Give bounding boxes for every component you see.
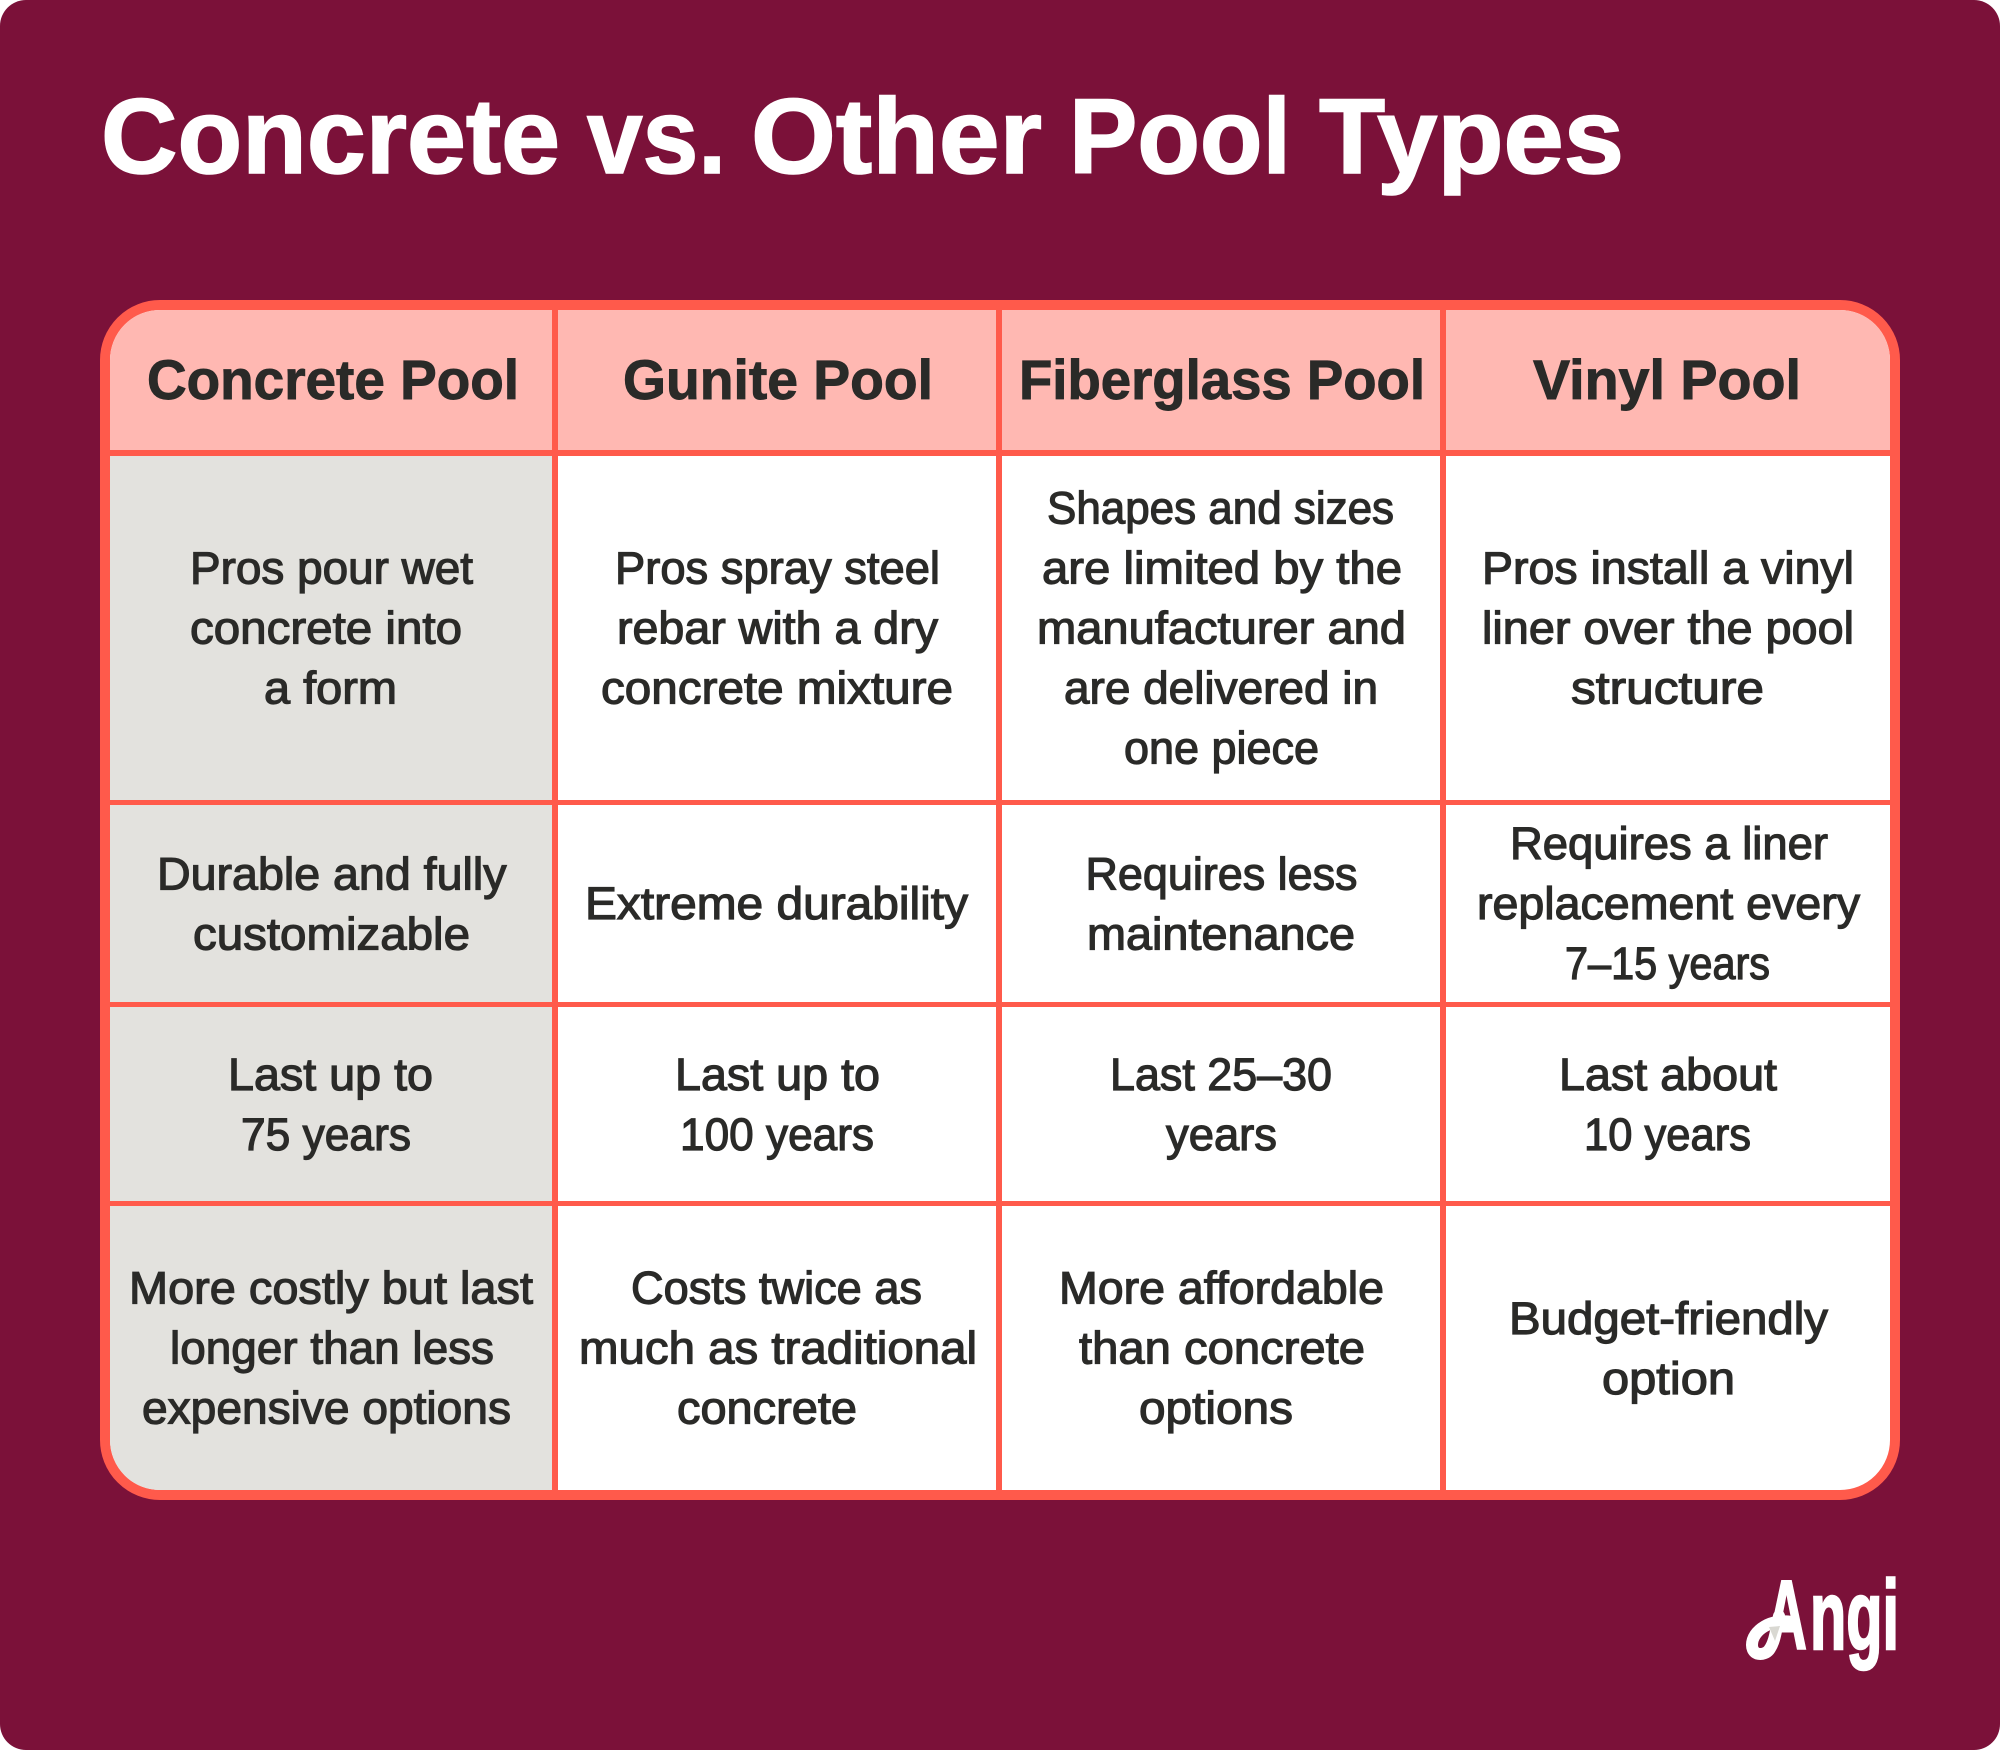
column headings: Concrete Pool <box>147 348 519 411</box>
row: construction: Pros spray steel <box>615 542 940 594</box>
row: construction <box>190 482 1854 774</box>
row: lifespan: Last about <box>1559 1049 1778 1100</box>
column headings: Vinyl Pool <box>1533 348 1801 411</box>
row: durability: maintenance <box>1087 908 1355 960</box>
row: cost: than concrete <box>1079 1322 1365 1374</box>
row: durability: Requires less <box>1086 848 1358 900</box>
first column fill <box>110 456 552 1490</box>
row: durability: Extreme durability <box>585 878 969 929</box>
row: lifespan: 75 years <box>241 1109 411 1160</box>
title: Concrete <box>101 76 560 196</box>
header row fill <box>110 310 1890 450</box>
row: lifespan: years <box>1166 1109 1277 1160</box>
title: Types <box>1319 76 1624 196</box>
row: construction: structure <box>1571 662 1764 714</box>
row: construction: rebar with a dry <box>617 602 939 654</box>
table base <box>105 305 1895 1495</box>
row: lifespan: Last 25–30 <box>1110 1049 1332 1100</box>
title <box>101 76 1624 196</box>
column headings <box>147 348 1801 411</box>
row: lifespan: 100 years <box>680 1109 874 1160</box>
row: lifespan: 10 years <box>1584 1109 1751 1160</box>
row: construction: a form <box>264 662 397 714</box>
row: durability: customizable <box>193 908 470 960</box>
row: lifespan: Last up to <box>675 1049 880 1100</box>
row: construction: Shapes and sizes <box>1047 482 1394 534</box>
row: construction: Pros pour wet <box>190 542 474 594</box>
logo: Angi: ngi <box>1810 1560 1899 1670</box>
title: vs. <box>587 76 726 196</box>
row: cost: longer than less <box>170 1322 494 1374</box>
row: construction: Pros install a vinyl <box>1482 542 1854 594</box>
row: construction: are delivered in <box>1064 662 1378 714</box>
row: cost: expensive options <box>142 1382 511 1434</box>
row: cost <box>129 1262 1829 1434</box>
row: cost: Budget-friendly <box>1509 1293 1829 1344</box>
logo: Angi <box>1752 1560 1899 1670</box>
row: durability: replacement every <box>1477 878 1861 929</box>
row: lifespan: Last up to <box>228 1049 433 1100</box>
row: durability <box>157 818 1861 989</box>
row: durability: Requires a liner <box>1510 818 1828 869</box>
row: construction: are limited by the <box>1042 542 1402 594</box>
row: cost: More costly but last <box>129 1262 534 1314</box>
column headings: Gunite Pool <box>623 348 933 411</box>
row: lifespan <box>228 1049 1778 1160</box>
row: cost: Costs twice as <box>631 1262 922 1314</box>
column headings: Fiberglass Pool <box>1019 348 1425 411</box>
row: cost: concrete <box>677 1382 857 1434</box>
row: construction: one piece <box>1124 722 1319 774</box>
panel: comparison table <box>105 305 1895 1495</box>
title: Other <box>751 76 1042 196</box>
row: durability: Durable and fully <box>157 848 507 900</box>
row: cost: option <box>1602 1353 1735 1404</box>
row: construction: manufacturer and <box>1037 602 1406 654</box>
row: cost: options <box>1139 1382 1293 1434</box>
row: construction: concrete into <box>190 602 462 654</box>
title: Pool <box>1069 76 1291 196</box>
row: construction: liner over the pool <box>1482 602 1854 654</box>
row: cost: much as traditional <box>579 1322 977 1374</box>
row: durability: 7–15 years <box>1565 938 1770 989</box>
row: construction: concrete mixture <box>601 662 953 714</box>
logo: Angi: A <box>1766 1560 1807 1670</box>
row: cost: More affordable <box>1059 1262 1384 1314</box>
